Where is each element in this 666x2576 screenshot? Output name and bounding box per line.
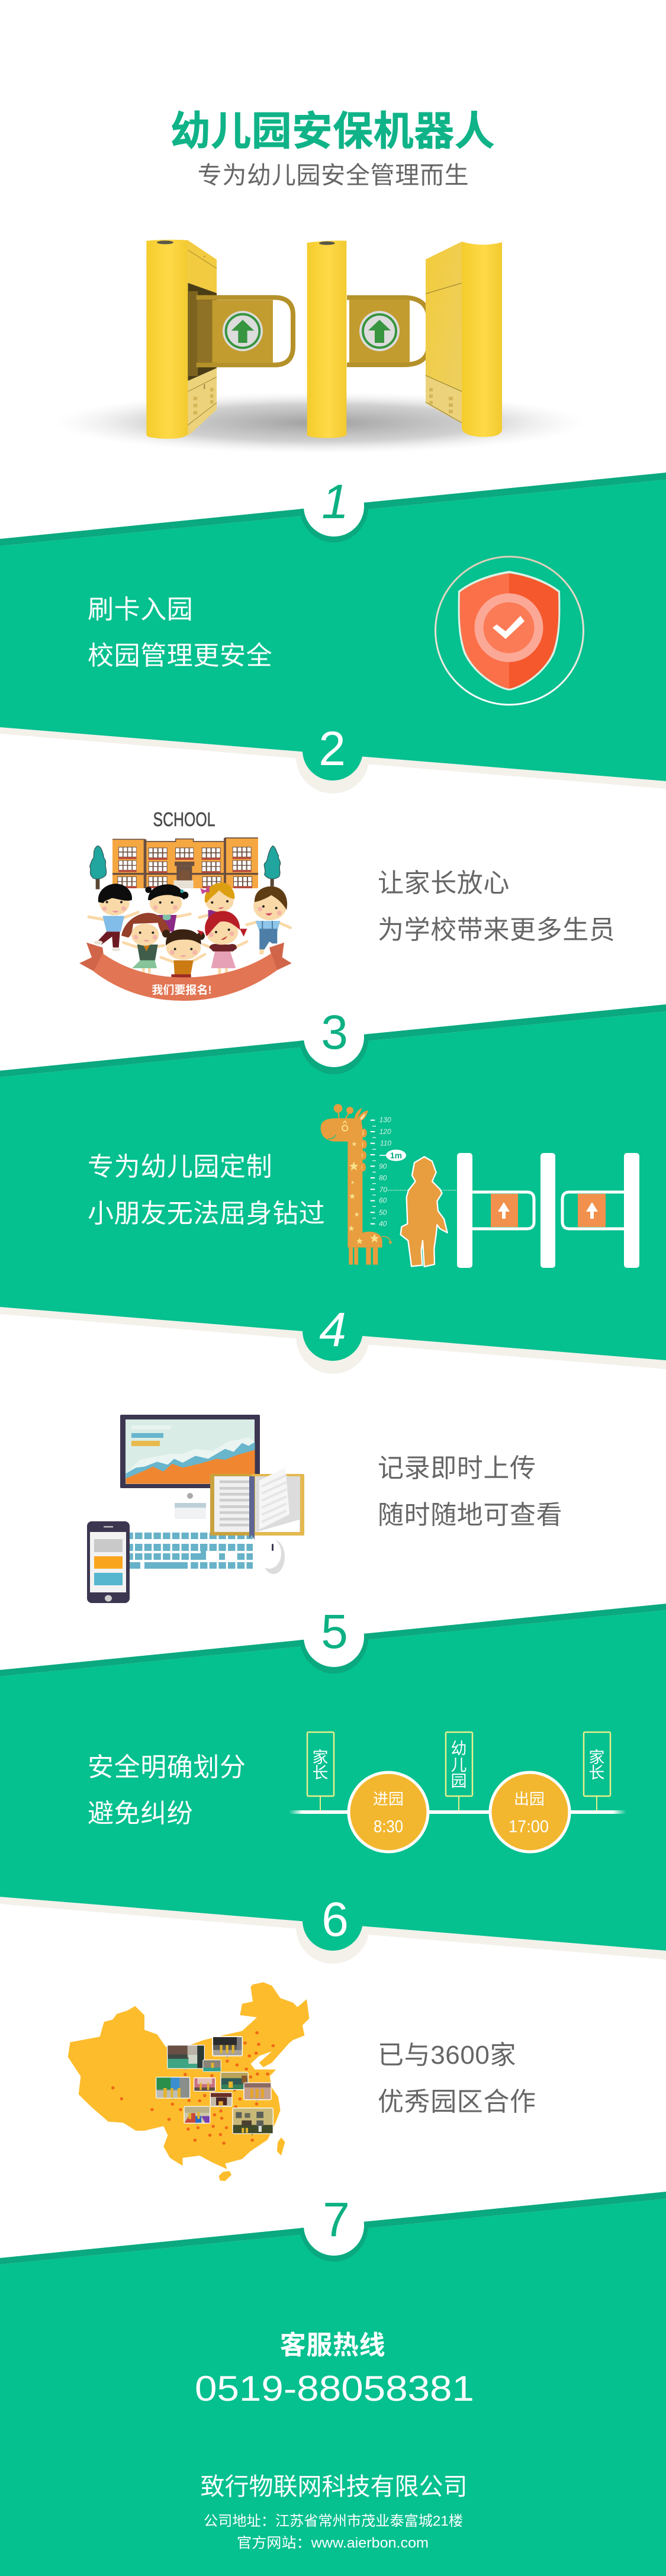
- step number 6: 6: [321, 1893, 349, 1947]
- badge: entry 8:30: 8:30: [374, 1817, 403, 1836]
- text: kindergarten custom: 小朋友无法屈身钻过: [88, 1199, 325, 1228]
- sign: parents left: [307, 1732, 334, 1796]
- photo 1: [212, 2036, 243, 2058]
- panel: green section 2: [0, 1004, 666, 1374]
- photo 2: [167, 2045, 205, 2070]
- height scale numbers: 40: [379, 1219, 387, 1228]
- sign: parents right: [584, 1732, 610, 1796]
- height scale numbers: 110: [380, 1139, 391, 1148]
- photo 7: [243, 2082, 272, 2102]
- company address: 公司地址：江苏省常州市茂业泰富城21楼: [204, 2513, 463, 2529]
- height scale numbers: 130: [379, 1116, 391, 1124]
- step number 5: 5: [321, 1605, 348, 1659]
- icon: safety shield: [436, 557, 584, 705]
- website: 官方网站：www.aierbon.com: [237, 2535, 429, 2551]
- right gate panel: [426, 242, 502, 437]
- label: SCHOOL: SCHOOL: [153, 808, 215, 830]
- child 7: [197, 911, 247, 974]
- center swing flap with arrow sign: [347, 297, 429, 365]
- 1m marker: [379, 1149, 406, 1161]
- gate flap right: [562, 1192, 624, 1229]
- giraffe: [321, 1104, 392, 1265]
- text: clear zones: 避免纠纷: [88, 1799, 193, 1828]
- left tree: [90, 846, 107, 889]
- height scale numbers: 90: [379, 1162, 387, 1171]
- height scale numbers: 120: [379, 1128, 391, 1136]
- company name: 致行物联网科技有限公司: [200, 2473, 468, 2500]
- timeline diagram: [289, 1732, 626, 1852]
- photo 6: [194, 2077, 215, 2092]
- map outline: [68, 1982, 309, 2169]
- ribbon text: 我们要报名!: [152, 984, 212, 997]
- sign: parents right: 家: [588, 1749, 605, 1766]
- child 5: [121, 913, 170, 974]
- child 2: [145, 884, 191, 932]
- child 3: [200, 882, 234, 922]
- panel: green section 3: [0, 1604, 666, 1964]
- step number 4: 4: [319, 1303, 346, 1357]
- left post: [146, 240, 188, 439]
- sign: kindergarten: 儿: [451, 1756, 466, 1774]
- hero: yellow swing gates: [54, 240, 587, 454]
- sign: parents left: 家: [313, 1749, 328, 1766]
- text: kindergarten custom: 专为幼儿园定制: [88, 1152, 272, 1181]
- flat gate diagram: [457, 1153, 639, 1268]
- left panel lower: [188, 368, 217, 436]
- text: reassure parents: 为学校带来更多生员: [378, 916, 615, 945]
- photo 10: [232, 2108, 274, 2135]
- text: 3600 partners: 优秀园区合作: [378, 2087, 536, 2116]
- monitor: [120, 1415, 260, 1519]
- photo 8: [210, 2092, 233, 2108]
- ribbon band: [94, 953, 277, 1001]
- text: card entry: 刷卡入园: [88, 595, 193, 624]
- photo 5: [156, 2077, 190, 2100]
- badge: entry 8:30: 进园: [373, 1790, 404, 1808]
- gate opening: [188, 283, 217, 381]
- step number 3: 3: [321, 1006, 348, 1059]
- hotline number: 0519-88058381: [195, 2369, 474, 2408]
- photo 3: [202, 2060, 221, 2072]
- child 4: [247, 886, 291, 955]
- height scale ticks: [371, 1120, 375, 1224]
- height scale numbers: 70: [379, 1186, 387, 1194]
- step number 1: 1: [321, 475, 349, 529]
- giraffe eye: [342, 1121, 348, 1131]
- left gate and center post: [146, 240, 346, 439]
- giraffe stars: [348, 1141, 379, 1244]
- illustration: giraffe height chart: [321, 1104, 448, 1267]
- illustration: devices and records: [87, 1415, 304, 1603]
- text: clear zones: 安全明确划分: [88, 1753, 246, 1782]
- gate posts: [457, 1153, 639, 1268]
- gate flap left: [472, 1192, 534, 1229]
- center post: [307, 240, 346, 438]
- child 6: [161, 929, 205, 978]
- map of China with photos: [68, 1982, 309, 2181]
- sign: parents right: 长: [588, 1764, 605, 1782]
- island: Hainan: [219, 2171, 231, 2181]
- badge: entry 8:30: [349, 1772, 428, 1852]
- dotted height line: [386, 1190, 457, 1191]
- height scale numbers: 60: [379, 1196, 387, 1205]
- text: 3600 partners: 已与3600家: [378, 2041, 516, 2070]
- panel: green section 1: [0, 473, 666, 794]
- right tree: [264, 846, 281, 886]
- sign: kindergarten: 幼: [451, 1740, 466, 1758]
- step number 2: 2: [318, 722, 346, 776]
- sign: kindergarten: 园: [451, 1772, 466, 1790]
- badge: exit 17:00: 出园: [514, 1790, 545, 1808]
- text: instant upload: 记录即时上传: [378, 1454, 536, 1483]
- ribbon tails: [79, 943, 292, 971]
- photo 9: [184, 2106, 210, 2125]
- mouse: [258, 1538, 285, 1574]
- text: reassure parents: 让家长放心: [378, 869, 510, 898]
- open book: [210, 1467, 304, 1540]
- keyboard: [130, 1533, 253, 1569]
- height scale numbers: [379, 1116, 391, 1228]
- island: Taiwan: [277, 2137, 285, 2156]
- title: 幼儿园安保机器人: [170, 109, 495, 154]
- child 1: [89, 884, 138, 951]
- panel: footer contact: [0, 2192, 666, 2576]
- badge: exit 17:00: [490, 1772, 570, 1852]
- hotline label: 客服热线: [280, 2331, 385, 2360]
- sign: parents left: 长: [313, 1764, 328, 1782]
- sign: kindergarten: [446, 1732, 472, 1796]
- illustration: school and children: [79, 808, 292, 1001]
- left swing flap with arrow sign: [197, 297, 293, 365]
- step number 7: 7: [323, 2193, 350, 2247]
- text: instant upload: 随时随地可查看: [378, 1501, 562, 1530]
- child silhouette: [401, 1157, 448, 1267]
- subtitle: 专为幼儿园安全管理而生: [198, 162, 469, 189]
- school building: [112, 838, 258, 888]
- badge: exit 17:00: 17:00: [509, 1817, 549, 1836]
- height scale numbers: 50: [379, 1209, 387, 1217]
- height scale numbers: 80: [379, 1174, 387, 1182]
- gate floor shadow: [54, 392, 587, 454]
- left panel upper: [188, 240, 217, 293]
- text: card entry: 校园管理更安全: [88, 641, 272, 670]
- 1m marker: 1m: [390, 1151, 402, 1160]
- location dots: [111, 2031, 275, 2145]
- photo 4: [220, 2072, 249, 2091]
- smartphone: [87, 1521, 130, 1603]
